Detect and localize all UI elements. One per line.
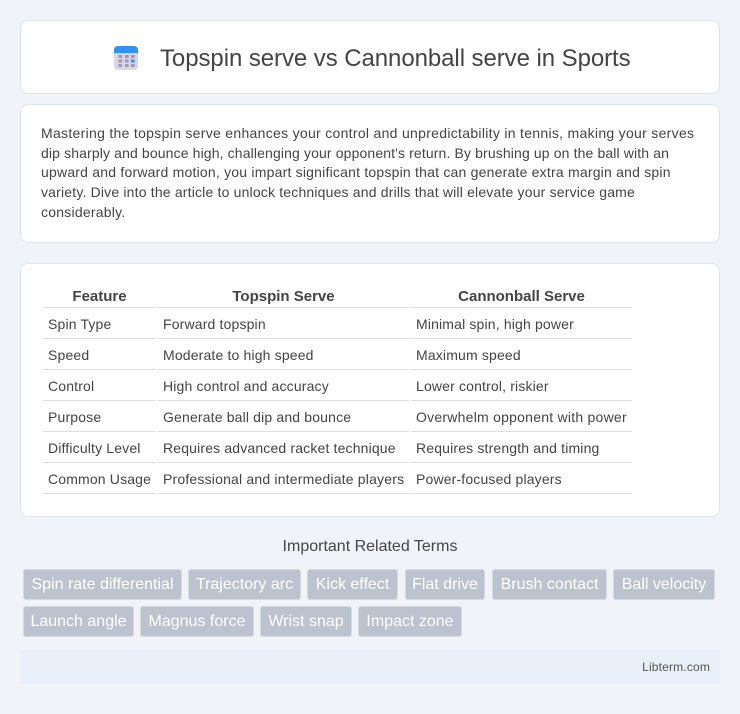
table: Purpose [48, 409, 101, 425]
table: Feature [72, 288, 127, 305]
footer source: Libterm.com [642, 660, 710, 674]
panel: introduction [20, 104, 720, 243]
heading: related terms: Important Related Terms [283, 538, 457, 555]
intro text [41, 125, 694, 220]
table: High control and accuracy [163, 378, 329, 394]
title: Topspin serve vs Cannonball serve in Sports [160, 45, 631, 72]
table: Topspin Serve [232, 288, 335, 305]
tags: related terms [23, 569, 715, 637]
intro text: Mastering the topspin serve enhances your control and unpredictability in tennis, making your serves [41, 125, 694, 141]
tags: related terms: Spin rate differential [31, 576, 174, 593]
tags: related terms: Flat drive [412, 576, 478, 593]
table: Common Usage [48, 471, 151, 487]
tags: related terms: Ball velocity [622, 576, 706, 593]
table: Minimal spin, high power [416, 316, 574, 332]
table: Moderate to high speed [163, 347, 314, 363]
title card [20, 20, 720, 94]
tags: related terms: Magnus force [149, 613, 245, 630]
tags: related terms: Launch angle [30, 613, 127, 630]
panel: comparison table [20, 263, 720, 517]
table: Requires strength and timing [416, 440, 599, 456]
intro text: variety. Dive into the article to unlock techniques and drills that will elevate your service game [41, 184, 635, 200]
table: Requires advanced racket technique [163, 440, 396, 456]
tags: related terms: Impact zone [366, 613, 454, 630]
table: Control [48, 378, 94, 394]
tags: related terms: Kick effect [316, 576, 389, 593]
footer [20, 650, 720, 684]
table: Spin Type [48, 316, 111, 332]
tags: related terms: Trajectory arc [196, 576, 293, 593]
table: Maximum speed [416, 347, 521, 363]
intro text: upward and forward motion, you impart significant topspin that can generate extra margin and spin [41, 164, 671, 180]
table: Difficulty Level [48, 440, 141, 456]
table: Cannonball Serve [458, 288, 585, 305]
intro text: considerably. [41, 204, 125, 220]
table: Power-focused players [416, 471, 562, 487]
icon: calendar [114, 46, 138, 70]
tags: related terms: Brush contact [501, 576, 598, 593]
table: Speed [48, 347, 89, 363]
table: Professional and intermediate players [163, 471, 404, 487]
intro text: dip sharply and bounce high, challenging your opponent's return. By brushing up on the ball with an [41, 145, 669, 161]
table: Lower control, riskier [416, 378, 549, 394]
table: Overwhelm opponent with power [416, 409, 627, 425]
table: Forward topspin [163, 316, 266, 332]
table [43, 288, 632, 494]
table: Generate ball dip and bounce [163, 409, 351, 425]
tags: related terms: Wrist snap [268, 613, 344, 630]
